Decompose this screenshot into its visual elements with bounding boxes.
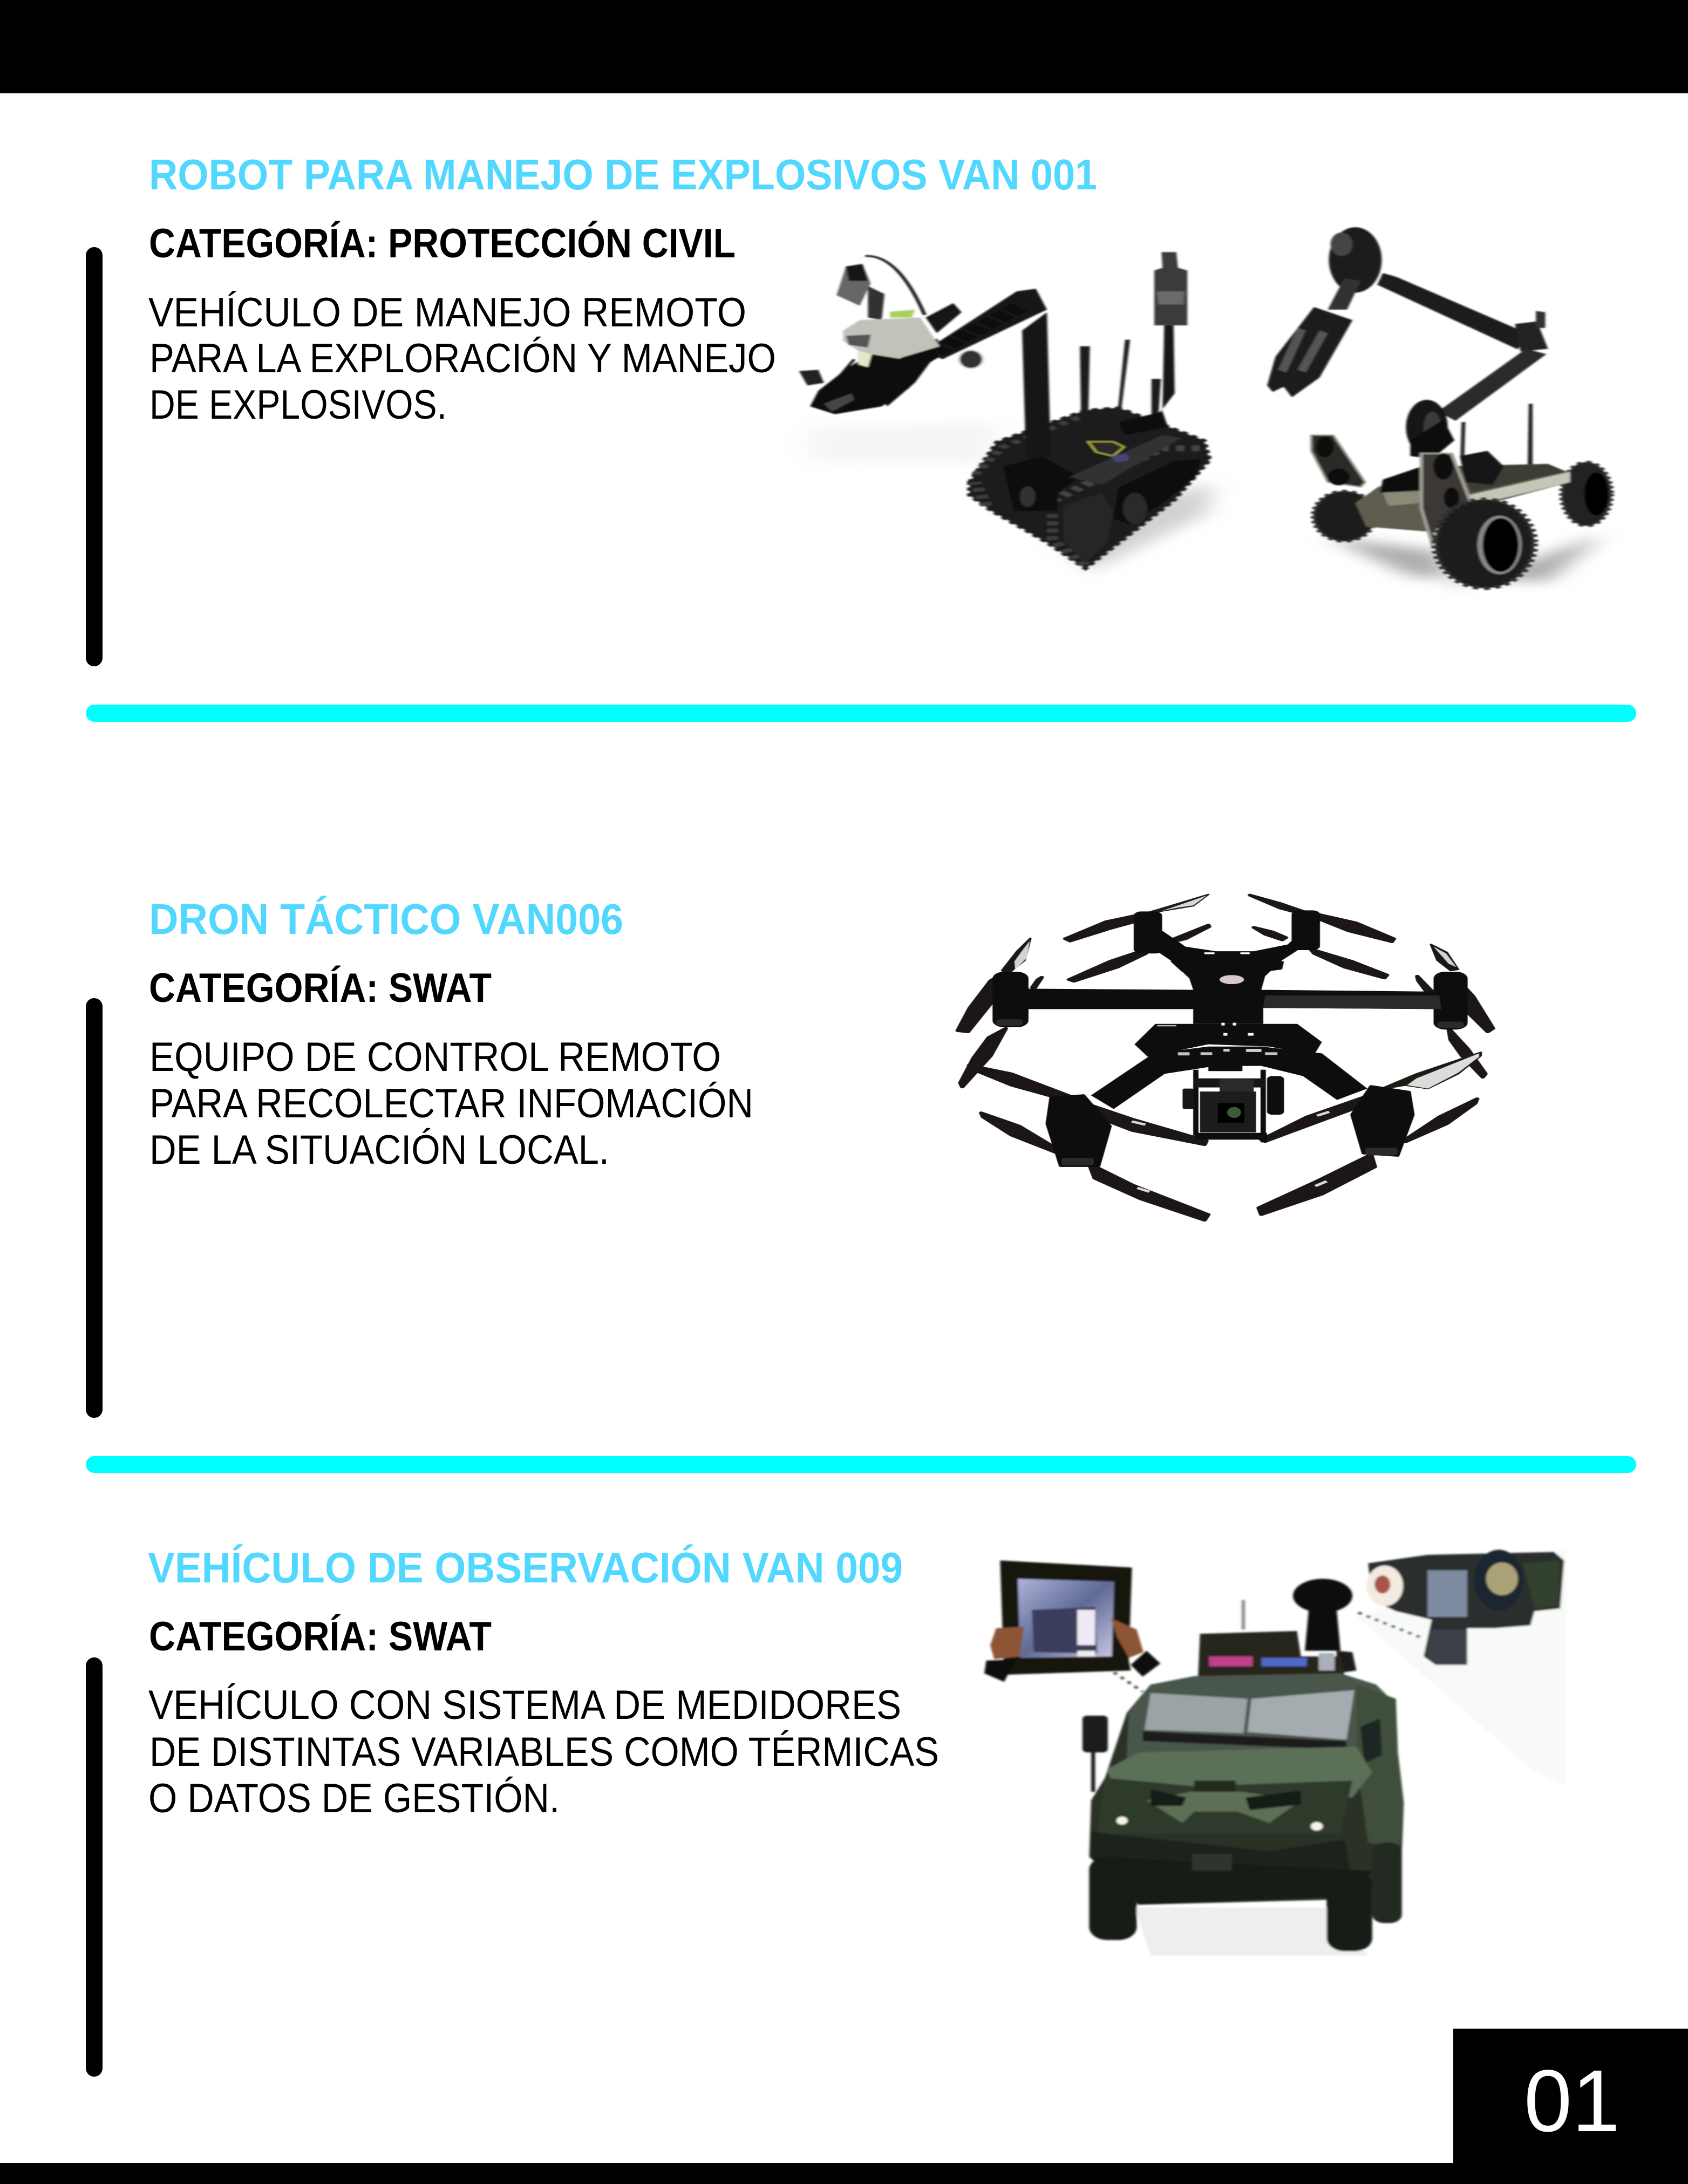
cab <box>1127 1674 1398 1758</box>
thermal camera inset <box>1366 1550 1564 1665</box>
camera gimbal <box>1182 1064 1284 1142</box>
motor bands <box>996 1019 1464 1165</box>
image: observation vehicle <box>984 1549 1566 1955</box>
page number box <box>1453 2029 1688 2184</box>
headlights <box>1117 1817 1323 1831</box>
panel: drone <box>86 895 1493 1418</box>
frame <box>996 926 1441 1109</box>
category: CATEGORÍA: SWAT <box>149 965 492 1011</box>
description: EQUIPO DE CONTROL REMOTO <box>149 1034 721 1080</box>
mast sensor <box>1293 1579 1356 1674</box>
wheeled robot <box>1267 227 1611 588</box>
light cone backdrop <box>1356 1549 1566 1786</box>
heading: DRON TÁCTICO VAN006 <box>149 895 623 943</box>
roof lights <box>1209 1653 1335 1670</box>
hood <box>1107 1746 1372 1798</box>
bumper and underbody <box>1091 1831 1372 1905</box>
description <box>148 290 776 428</box>
top black band <box>0 0 1688 93</box>
vertical bar <box>86 1657 103 2077</box>
propeller blades <box>958 895 1493 1220</box>
vertical bar <box>86 247 103 666</box>
panel: robot <box>86 151 1611 666</box>
page number: 01 <box>1524 2051 1620 2150</box>
translucent blade tips <box>1002 895 1481 1090</box>
tracked robot <box>920 252 1209 569</box>
category: CATEGORÍA: PROTECCIÓN CIVIL <box>149 221 736 267</box>
description: DE DISTINTAS VARIABLES COMO TÉRMICAS <box>149 1729 939 1775</box>
heading: VEHÍCULO DE OBSERVACIÓN VAN 009 <box>148 1544 903 1592</box>
description <box>149 1034 753 1173</box>
description: DE EXPLOSIVOS. <box>149 382 447 428</box>
bottom black band <box>0 2163 1688 2184</box>
description: PARA RECOLECTAR INFOMACIÓN <box>149 1081 753 1127</box>
center light <box>1220 975 1244 984</box>
grille <box>1097 1778 1352 1834</box>
robot shadows <box>810 422 1603 587</box>
description: PARA LA EXPLORACIÓN Y MANEJO <box>149 336 776 381</box>
frame cut-outs <box>1157 952 1277 1055</box>
blade labels <box>1131 1111 1330 1193</box>
roof box <box>1198 1631 1344 1679</box>
description: VEHÍCULO CON SISTEMA DE MEDIDORES <box>148 1682 901 1728</box>
motors <box>995 911 1466 1166</box>
description <box>148 1682 939 1821</box>
divider 1 <box>86 705 1636 722</box>
panel: vehicle <box>86 1544 1566 2077</box>
tablet <box>984 1560 1160 1682</box>
ground shadow <box>1135 1908 1368 1955</box>
vertical bar <box>86 998 103 1418</box>
dotted connectors <box>1107 1613 1425 1691</box>
vehicle body <box>1089 1674 1404 1905</box>
image: drone <box>958 895 1493 1220</box>
heading: ROBOT PARA MANEJO DE EXPLOSIVOS VAN 001 <box>149 151 1097 199</box>
side body <box>1356 1684 1404 1848</box>
wheels <box>1089 1842 1402 1951</box>
category: CATEGORÍA: SWAT <box>149 1614 492 1660</box>
mirror <box>1083 1716 1108 1792</box>
image: two robots <box>799 227 1611 588</box>
description: DE LA SITUACIÓN LOCAL. <box>149 1127 609 1173</box>
description: O DATOS DE GESTIÓN. <box>148 1776 560 1821</box>
tracked robot gripper <box>799 256 983 414</box>
antenna <box>1242 1600 1245 1629</box>
windshield <box>1142 1690 1355 1750</box>
divider 2 <box>86 1456 1636 1473</box>
description: VEHÍCULO DE MANEJO REMOTO <box>148 290 746 336</box>
